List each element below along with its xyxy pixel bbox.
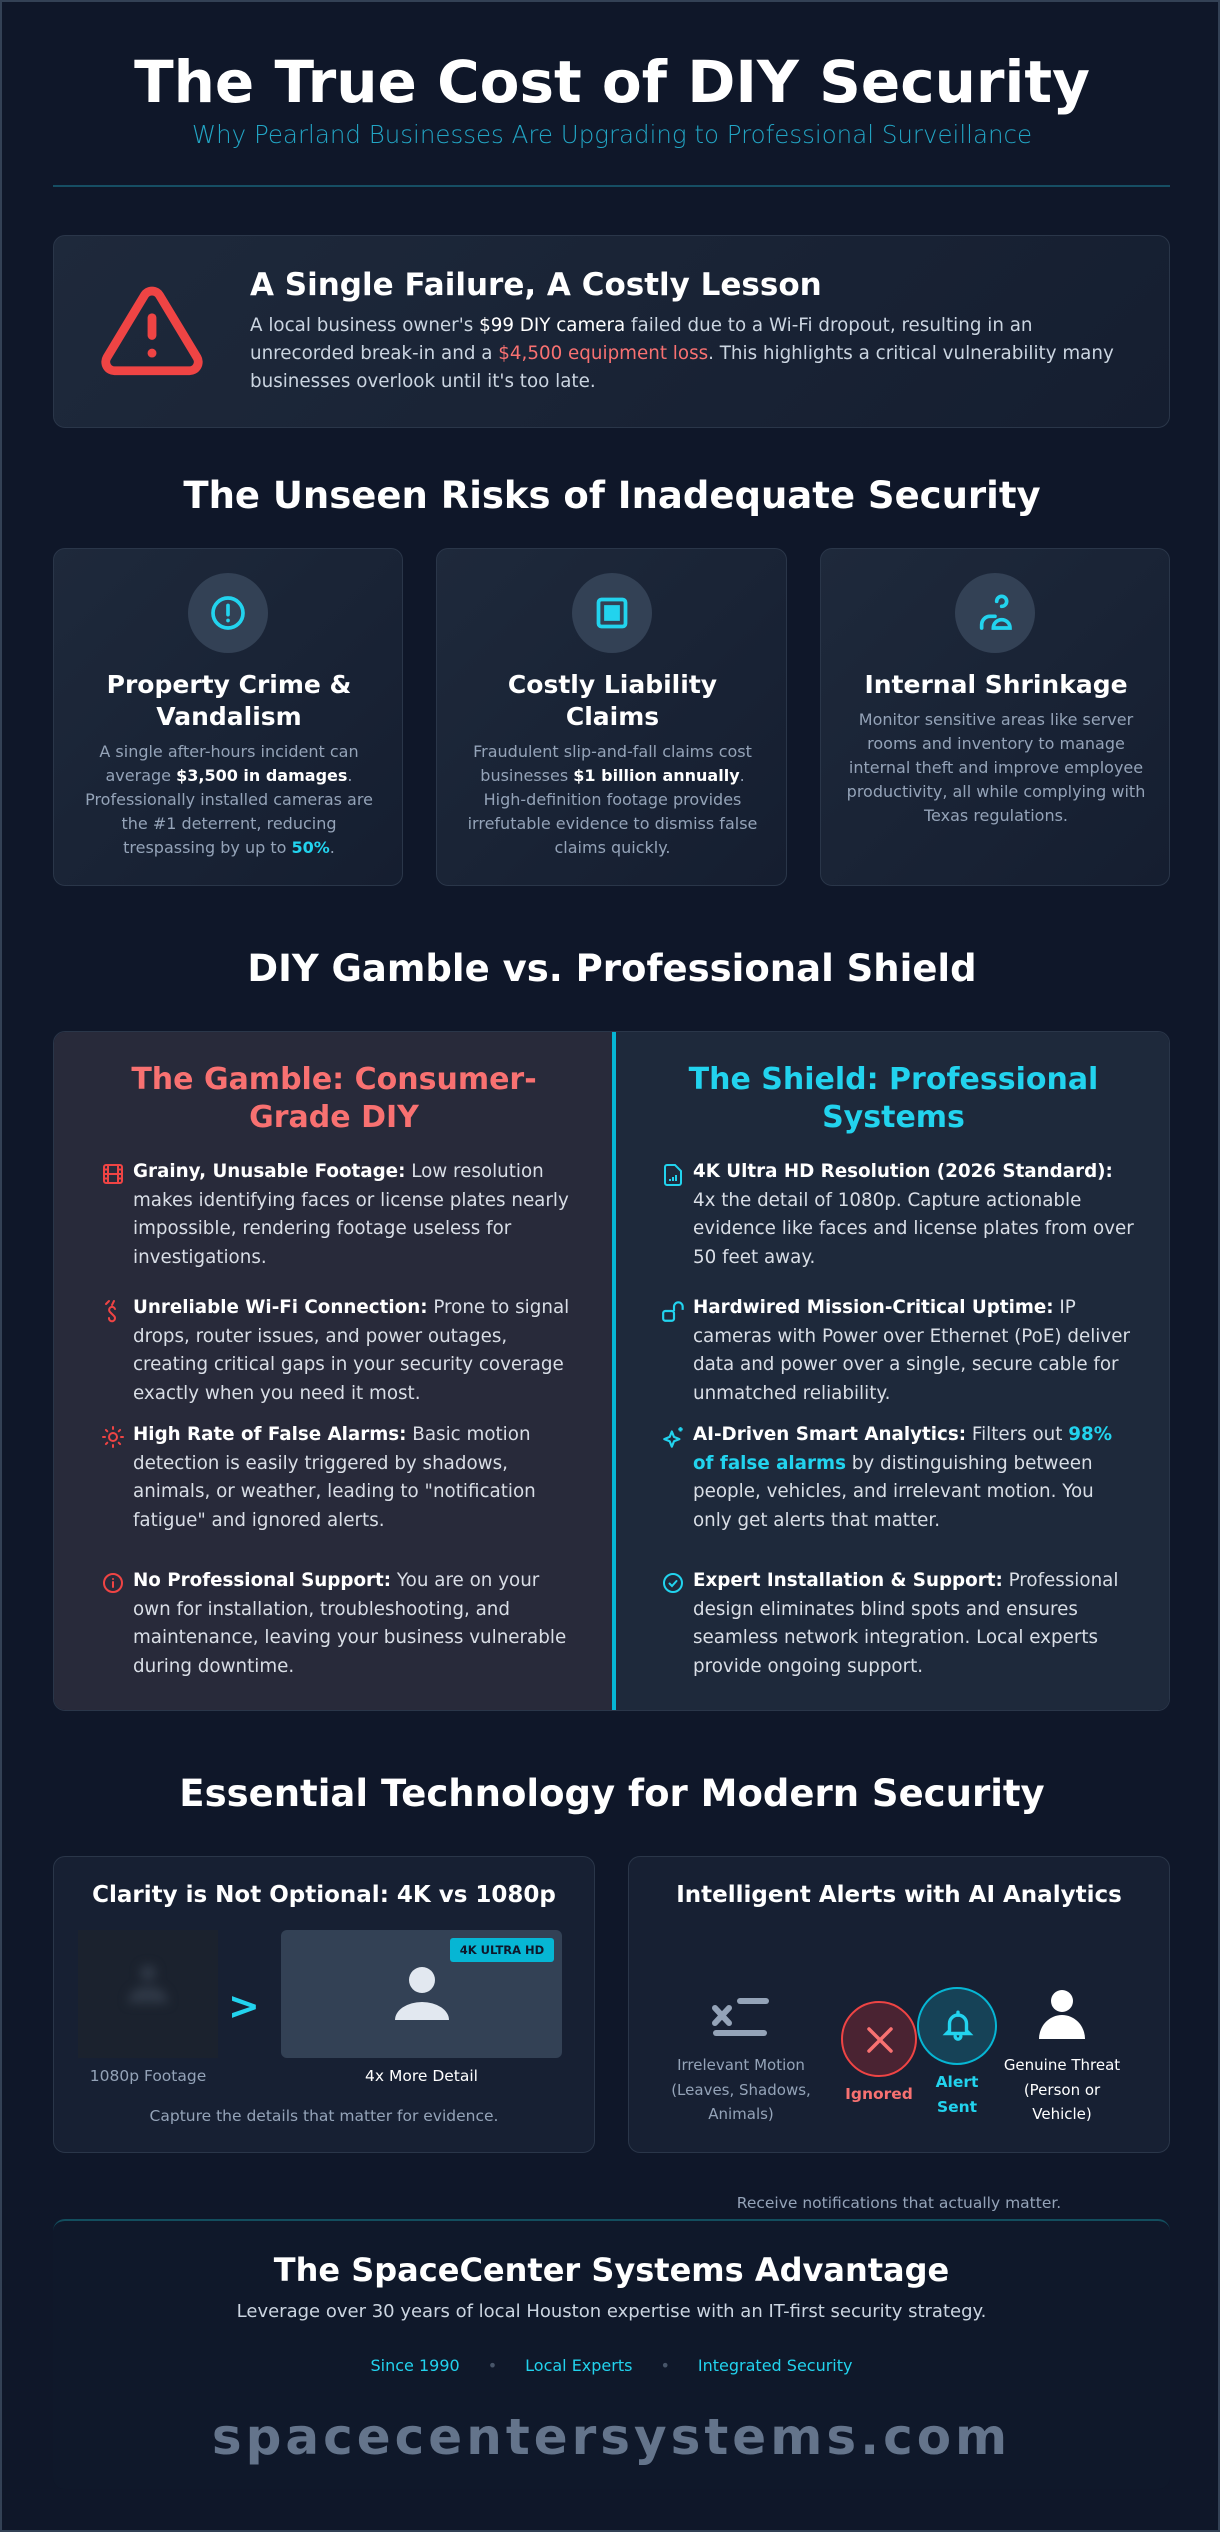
panel: footer advantage: [53, 2219, 1170, 2489]
card text: Monitor sensitive areas like server rooms and inventory to manage internal theft and improve employee productivity, all while complying with Texas regulations.: [847, 710, 1145, 825]
heading: essential technology: Essential Technology for Modern Security: [179, 1772, 1045, 1815]
badge: [450, 1938, 554, 1962]
icon: alert badge: [188, 573, 268, 653]
blurred 1080p image: [78, 1930, 218, 2058]
icon: person: [1039, 1990, 1085, 2039]
label: irrelevant: Irrelevant Motion (Leaves, Shadows, Animals): [671, 2056, 811, 2123]
heading: The Gamble: Consumer-Grade DIY: [131, 1062, 537, 1135]
panel: liability: [436, 548, 787, 886]
panel: gamble: [54, 1032, 614, 1712]
icon: irrelevant motion: [712, 1998, 769, 2036]
card heading: Clarity is Not Optional: 4K vs 1080p: [92, 1882, 556, 1908]
icon: warning triangle: [101, 286, 203, 376]
item: false alarms: High Rate of False Alarms: Basic motion detection is easily triggered by shadows, animals, or weather, leading to "notification fatigue" and ignored alerts.: [133, 1424, 536, 1530]
item: footage: Grainy, Unusable Footage: Low resolution makes identifying faces or license plates nearly impossible, rendering footage useless for investigations.: [133, 1161, 569, 1268]
card heading: Costly Liability Claims: [508, 670, 717, 731]
4k image: [281, 1930, 562, 2058]
icon: person: [395, 1967, 449, 2020]
card heading: Internal Shrinkage: [864, 670, 1128, 699]
icon: alert bell: [917, 1987, 997, 2065]
panel: costly lesson: [53, 235, 1170, 428]
label: genuine threat: Genuine Threat (Person or Vehicle): [1004, 2056, 1120, 2123]
footer tags: Since 1990 • Local Experts • Integrated Security: [371, 2356, 852, 2375]
arrow: >: [228, 1984, 260, 2028]
panel: comparison: [53, 1031, 1170, 1711]
footer text: Leverage over 30 years of local Houston expertise with an IT-first security strategy.: [237, 2301, 986, 2322]
caption: notifications: Receive notifications that actually matter.: [737, 2194, 1061, 2212]
subtitle: Why Pearland Businesses Are Upgrading to Professional Surveillance: [192, 120, 1032, 149]
item: wifi: Unreliable Wi-Fi Connection: Prone to signal drops, router issues, and power outages, creating critical gaps in your security coverage exactly when you need it most.: [133, 1297, 569, 1404]
panel: ai alerts: [628, 1856, 1170, 2153]
icon: user: [955, 573, 1035, 653]
card text: Fraudulent slip-and-fall claims cost businesses $1 billion annually. High-definition footage provides irrefutable evidence to dismiss false claims quickly.: [468, 742, 757, 857]
caption: Capture the details that matter for evidence.: [150, 2107, 498, 2125]
card heading: Intelligent Alerts with AI Analytics: [676, 1882, 1122, 1908]
item: expert: Expert Installation & Support: Professional design eliminates blind spots and ensures seamless network integration. Local experts provide ongoing support.: [693, 1570, 1118, 1676]
icon: ignored: [841, 2001, 917, 2077]
heading: A Single Failure, A Costly Lesson: [250, 267, 822, 303]
card text: A single after-hours incident can average $3,500 in damages. Professionally installed cameras are the #1 deterrent, reducing trespassing by up to 50%.: [85, 742, 373, 857]
label: ignored: Ignored: [845, 2085, 913, 2103]
panel: property crime: [53, 548, 403, 886]
icon: safe: [572, 573, 652, 653]
panel: shield: [616, 1032, 1171, 1712]
item: hardwired: Hardwired Mission-Critical Uptime: IP cameras with Power over Ethernet (PoE) deliver data and power over a single, secure cable for unmatched reliability.: [693, 1297, 1130, 1404]
card heading: Property Crime & Vandalism: [107, 670, 351, 731]
footer heading: The SpaceCenter Systems Advantage: [274, 2251, 949, 2289]
text block: A local business owner's $99 DIY camera failed due to a Wi-Fi dropout, resulting in an unrecorded break-in and a $4,500 equipment loss. This highlights a critical vulnerability many businesses overlook until it's too late.: [250, 315, 1114, 392]
title: The True Cost of DIY Security: [134, 48, 1090, 116]
label: alert sent: Alert Sent: [936, 2073, 978, 2116]
badge: 4K ULTRA HD: [460, 1943, 544, 1957]
label 1080p: 1080p Footage: [90, 2067, 206, 2085]
heading: gamble vs shield: DIY Gamble vs. Professional Shield: [247, 947, 977, 990]
panel: 4k vs 1080p: [53, 1856, 595, 2153]
item: 4k: 4K Ultra HD Resolution (2026 Standard): 4x the detail of 1080p. Capture actionable evidence like faces and license plates from over 50 feet away.: [693, 1161, 1134, 1268]
heading: The Shield: Professional Systems: [689, 1062, 1098, 1135]
panel: shrinkage: [820, 548, 1170, 886]
heading: unseen risks: The Unseen Risks of Inadequate Security: [183, 474, 1041, 517]
website: spacecentersystems.com: [212, 2408, 1011, 2466]
item: support: No Professional Support: You are on your own for installation, troubleshooting, and maintenance, leaving your business vulnerable during downtime.: [133, 1570, 566, 1676]
label 4x: 4x More Detail: [365, 2067, 478, 2085]
item: ai: AI-Driven Smart Analytics: Filters out 98% of false alarms by distinguishing between people, vehicles, and irrelevant motion. You only get alerts that matter.: [693, 1424, 1112, 1530]
